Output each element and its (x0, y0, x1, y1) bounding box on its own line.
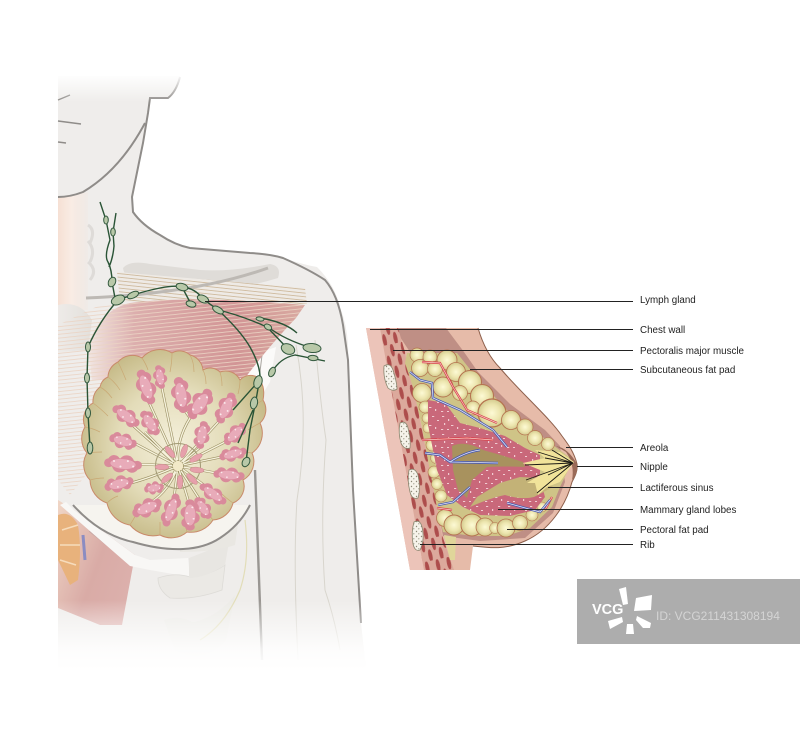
label: lymph gland: Lymph gland (640, 295, 696, 306)
arm and armpit (243, 340, 340, 660)
lymph nodes (84, 216, 321, 468)
watermark (577, 579, 800, 644)
lymphatic system (84, 202, 325, 468)
pectoral muscle (88, 299, 305, 380)
fade at image top (56, 74, 186, 102)
skin and subcutaneous layer (366, 328, 577, 570)
darker underlying band (394, 328, 565, 541)
lactiferous sinus tissue (452, 444, 553, 507)
scallop fold lines (85, 353, 263, 535)
breast with lobes (82, 350, 266, 538)
label: nipple (577, 462, 668, 473)
pectoralis major band (380, 328, 454, 570)
watermark logo (592, 587, 652, 634)
left chest soft tissue (58, 304, 92, 352)
muscle and chest striations (58, 300, 305, 495)
nipple yellow ducts (523, 450, 574, 495)
lower chest and ribs (58, 500, 247, 656)
fat cells (410, 348, 554, 537)
neck vertebrae and clavicle (86, 225, 307, 304)
areola cap (556, 446, 577, 480)
fat tail near chest (444, 535, 456, 560)
label: lactiferous sinus: Lactiferous sinus (640, 483, 714, 494)
fade at image bottom (56, 600, 376, 670)
breast skin outline (73, 505, 250, 549)
lymph vessels (87, 202, 325, 462)
outer body outline (132, 77, 361, 623)
fat band base (405, 353, 573, 536)
label: pectoralis major muscle: Pectoralis major muscle (640, 346, 745, 357)
mammary gland lobes (428, 400, 545, 516)
red blood vessels (422, 362, 552, 510)
label: chest wall: Chest wall (640, 325, 685, 336)
areola ring and nipple (155, 443, 204, 489)
ribs (384, 365, 423, 550)
outer skin edge (473, 328, 577, 548)
ducts (129, 388, 229, 503)
face marks (58, 95, 81, 143)
label: subcutaneous fat pad: Subcutaneous fat pad (640, 365, 735, 376)
label: mammary gland lobes: Mammary gland lobes (640, 505, 736, 516)
black lactiferous lines (525, 450, 573, 493)
label: rib: Rib (640, 540, 655, 551)
chin line (58, 123, 145, 197)
lobes (103, 364, 250, 531)
watermark id: ID: VCG211431308194 (656, 609, 780, 623)
label: pectoral fat pad: Pectoral fat pad (640, 525, 709, 536)
blue blood vessels (410, 372, 550, 512)
body silhouette (58, 76, 366, 668)
cross-section of breast (366, 328, 577, 570)
watermark logo: VCG (592, 602, 623, 618)
label: areola: Areola (640, 443, 669, 454)
chest wall strip (366, 328, 424, 570)
fatty tissue outline (82, 350, 266, 538)
label: areola (566, 443, 669, 454)
label: nipple: Nipple (640, 462, 668, 473)
neck column (58, 192, 88, 310)
